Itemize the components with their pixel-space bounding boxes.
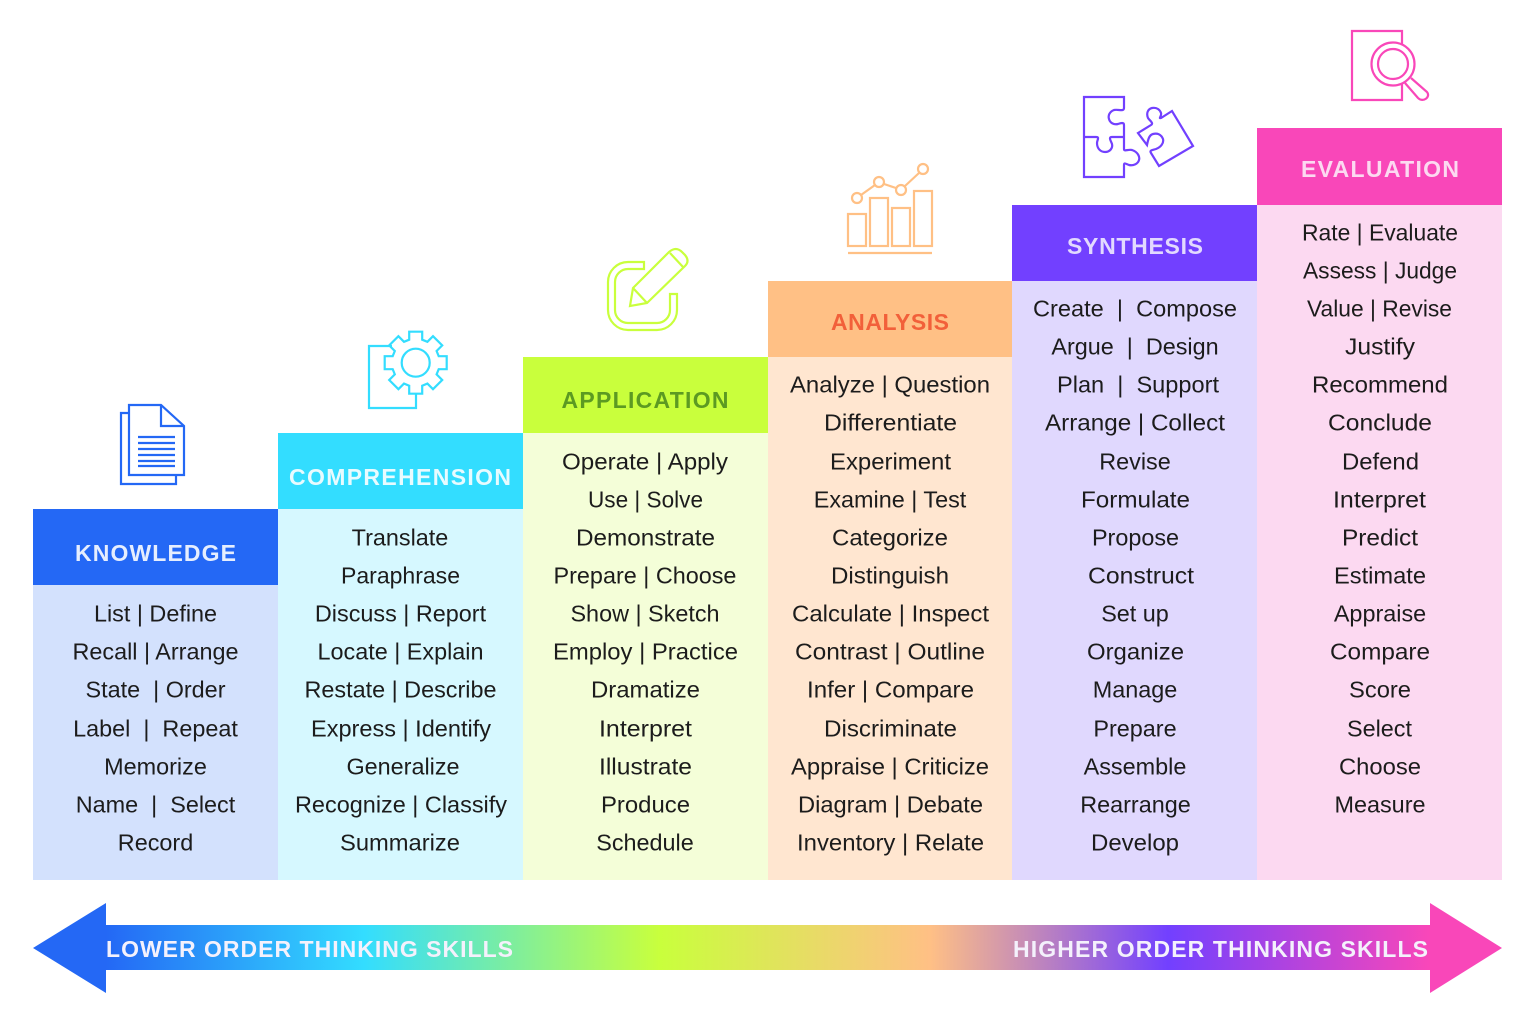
- word list: synthesis: Manage: [1093, 676, 1177, 702]
- word list: comprehension: Restate | Describe: [305, 676, 496, 702]
- word list: application: Interpret: [599, 716, 693, 742]
- heading: synthesis: SYNTHESIS: [1067, 233, 1203, 259]
- word list: synthesis: Rearrange: [1080, 792, 1191, 818]
- word list: application: Show | Sketch: [570, 600, 720, 626]
- word list: application: Produce: [601, 792, 690, 818]
- word list: synthesis: Arrange | Collect: [1045, 410, 1226, 436]
- word list: application: Operate | Apply: [562, 448, 728, 474]
- word list: synthesis: Prepare: [1093, 716, 1177, 742]
- icon: puzzle pieces: [1084, 97, 1193, 177]
- word list: comprehension: Express | Identify: [311, 716, 491, 742]
- word list: application: Demonstrate: [576, 524, 715, 550]
- word list: evaluation: Defend: [1342, 448, 1419, 474]
- word list: evaluation: Score: [1349, 676, 1411, 702]
- panel: synthesis: [1012, 97, 1257, 880]
- word list: comprehension: Discuss | Report: [315, 600, 487, 626]
- word list: analysis: Analyze | Question: [790, 372, 990, 398]
- heading: knowledge: KNOWLEDGE: [75, 540, 236, 566]
- word list: knowledge: Name | Select: [76, 792, 236, 818]
- word list: evaluation: [1257, 205, 1502, 880]
- word list: application: Use | Solve: [588, 486, 703, 512]
- word list: comprehension: Generalize: [346, 754, 460, 780]
- word list: comprehension: Summarize: [340, 830, 460, 856]
- word list: evaluation: Appraise: [1334, 600, 1426, 626]
- word list: synthesis: Assemble: [1084, 754, 1186, 780]
- icon: documents: [121, 405, 184, 484]
- word list: evaluation: Measure: [1334, 792, 1426, 818]
- word list: knowledge: Record: [118, 830, 193, 856]
- word list: analysis: Categorize: [832, 524, 948, 550]
- word list: analysis: Diagram | Debate: [798, 792, 983, 818]
- word list: evaluation: Estimate: [1334, 562, 1426, 588]
- word list: synthesis: Set up: [1101, 600, 1169, 626]
- word list: analysis: Contrast | Outline: [795, 638, 985, 664]
- panel: comprehension: [278, 332, 523, 880]
- word list: evaluation: Assess | Judge: [1303, 258, 1457, 284]
- word list: application: Illustrate: [599, 754, 692, 780]
- heading: synthesis: [1012, 205, 1257, 281]
- icon: pencil and square: [608, 249, 688, 330]
- word list: comprehension: Locate | Explain: [317, 638, 484, 664]
- arrow label: lower order: LOWER ORDER THINKING SKILLS: [106, 936, 513, 962]
- word list: synthesis: Propose: [1092, 524, 1179, 550]
- word list: evaluation: Compare: [1330, 638, 1430, 664]
- word list: analysis: [768, 357, 1013, 880]
- arrow: lower to higher order thinking skills: [33, 903, 1502, 993]
- word list: knowledge: [33, 585, 278, 880]
- word list: synthesis: Plan | Support: [1057, 372, 1220, 398]
- arrow label: higher order: HIGHER ORDER THINKING SKILLS: [1013, 936, 1428, 962]
- word list: application: Dramatize: [591, 676, 700, 702]
- word list: application: [523, 433, 768, 880]
- word list: comprehension: Recognize | Classify: [295, 792, 507, 818]
- panel: evaluation: [1257, 31, 1502, 880]
- word list: evaluation: Choose: [1339, 754, 1421, 780]
- word list: analysis: Distinguish: [831, 562, 949, 588]
- heading: evaluation: EVALUATION: [1301, 156, 1459, 182]
- word list: evaluation: Rate | Evaluate: [1302, 220, 1458, 246]
- word list: synthesis: Develop: [1091, 830, 1179, 856]
- heading: comprehension: COMPREHENSION: [289, 464, 511, 490]
- heading: knowledge: [33, 509, 278, 585]
- word list: comprehension: Translate: [352, 524, 448, 550]
- word list: analysis: Differentiate: [824, 410, 957, 436]
- word list: synthesis: Create | Compose: [1033, 296, 1237, 322]
- word list: analysis: Experiment: [830, 448, 952, 474]
- word list: comprehension: Paraphrase: [341, 562, 460, 588]
- word list: synthesis: Revise: [1099, 448, 1171, 474]
- word list: knowledge: Label | Repeat: [73, 716, 238, 742]
- word list: evaluation: Conclude: [1328, 410, 1432, 436]
- word list: evaluation: Predict: [1342, 524, 1419, 550]
- word list: evaluation: Recommend: [1312, 372, 1448, 398]
- panel: application: [523, 249, 768, 880]
- word list: application: Prepare | Choose: [554, 562, 736, 588]
- word list: application: Schedule: [596, 830, 694, 856]
- word list: analysis: Appraise | Criticize: [791, 754, 989, 780]
- icon: page with gear: [369, 332, 447, 408]
- word list: knowledge: State | Order: [86, 676, 226, 702]
- word list: evaluation: Value | Revise: [1307, 296, 1452, 322]
- word list: synthesis: Organize: [1087, 638, 1184, 664]
- word list: comprehension: [278, 509, 523, 880]
- heading: analysis: [768, 281, 1013, 357]
- word list: synthesis: Formulate: [1081, 486, 1190, 512]
- word list: analysis: Inventory | Relate: [797, 830, 984, 856]
- word list: analysis: Examine | Test: [814, 486, 967, 512]
- icon: page with magnifying glass: [1352, 31, 1428, 100]
- word list: knowledge: Memorize: [104, 754, 207, 780]
- word list: synthesis: Construct: [1088, 562, 1195, 588]
- heading: application: APPLICATION: [562, 387, 728, 413]
- panel: analysis: [768, 164, 1013, 880]
- word list: evaluation: Justify: [1345, 334, 1415, 360]
- word list: analysis: Calculate | Inspect: [792, 600, 990, 626]
- heading: comprehension: [278, 433, 523, 509]
- word list: analysis: Discriminate: [824, 716, 957, 742]
- word list: analysis: Infer | Compare: [807, 676, 974, 702]
- heading: evaluation: [1257, 128, 1502, 205]
- word list: evaluation: Select: [1347, 716, 1413, 742]
- word list: synthesis: Argue | Design: [1051, 334, 1219, 360]
- panel: knowledge: [33, 405, 278, 880]
- icon: bar chart with trend line: [848, 164, 932, 253]
- heading: application: [523, 357, 768, 433]
- word list: knowledge: Recall | Arrange: [72, 638, 238, 664]
- word list: evaluation: Interpret: [1333, 486, 1427, 512]
- heading: analysis: ANALYSIS: [831, 309, 949, 335]
- word list: application: Employ | Practice: [553, 638, 738, 664]
- word list: knowledge: List | Define: [94, 600, 217, 626]
- word list: synthesis: [1012, 281, 1257, 880]
